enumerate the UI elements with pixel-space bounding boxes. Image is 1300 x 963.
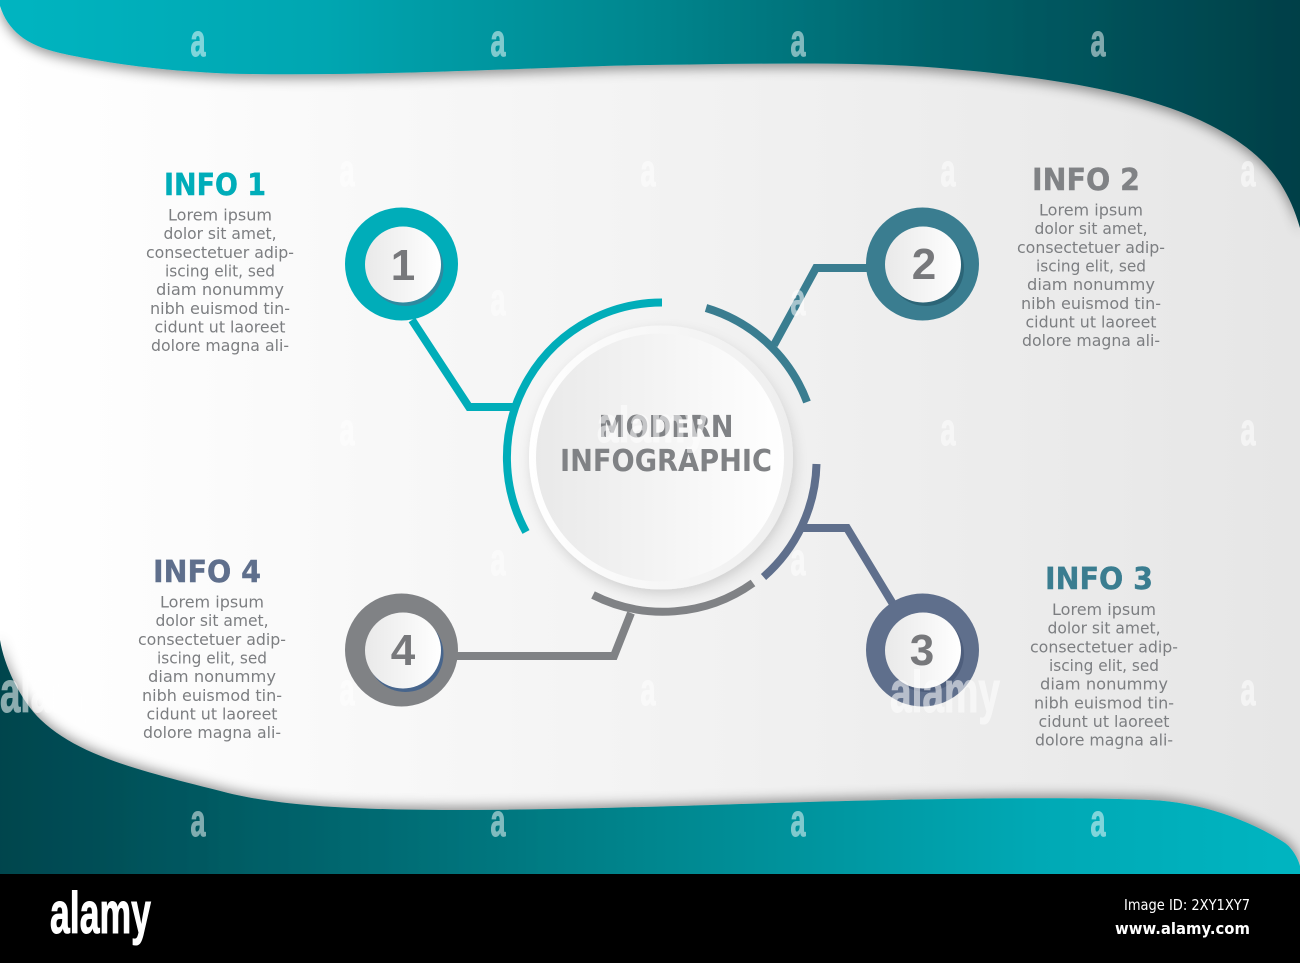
node 4: 4 bbox=[391, 626, 416, 675]
text: info 1 body: diam nonummy bbox=[156, 280, 284, 299]
node 2: 2 bbox=[912, 240, 936, 289]
text: info 1 body: consectetuer adip- bbox=[146, 243, 294, 262]
block: info 3 bbox=[1030, 562, 1178, 750]
text: info 4 body: cidunt ut laoreet bbox=[146, 704, 278, 724]
watermarks on bands: a bbox=[490, 15, 506, 66]
top wave band bbox=[0, 0, 1300, 228]
block: info 1 bbox=[146, 168, 294, 355]
watermarks on panel: a bbox=[790, 274, 806, 325]
central disc bbox=[529, 326, 793, 590]
text: info 2 body: dolore magna ali- bbox=[1022, 331, 1160, 350]
bottom wave band bbox=[0, 640, 1300, 874]
watermarks on panel: a bbox=[640, 145, 656, 196]
text: info 2 body bbox=[1017, 200, 1165, 350]
text: info 3 body: consectetuer adip- bbox=[1030, 637, 1178, 656]
text: info 2 body: diam nonummy bbox=[1027, 275, 1155, 294]
arc segment 4 bbox=[593, 583, 753, 612]
watermarks on panel: alamy bbox=[597, 397, 707, 453]
text: info 3 body: dolor sit amet, bbox=[1048, 619, 1160, 638]
connector 2 bbox=[774, 268, 869, 345]
watermarks on bands bbox=[190, 15, 1106, 846]
connector 1 bbox=[412, 320, 513, 407]
heading: info 1: INFO 1 bbox=[164, 168, 266, 203]
text: info 2 body: dolor sit amet, bbox=[1034, 219, 1148, 238]
watermarks on bands: a bbox=[190, 15, 206, 66]
watermarks on panel: a bbox=[940, 404, 956, 455]
node 1: 1 bbox=[391, 241, 415, 290]
watermarks on bands: a bbox=[1090, 795, 1106, 846]
watermarks on panel bbox=[0, 145, 1256, 725]
text: info 3 body: cidunt ut laoreet bbox=[1038, 712, 1170, 731]
heading: info 4: INFO 4 bbox=[153, 555, 261, 590]
heading: info 3: INFO 3 bbox=[1045, 562, 1153, 597]
block: info 4 bbox=[138, 555, 286, 742]
text: info 3 body: dolore magna ali- bbox=[1035, 731, 1173, 750]
arc segment 2 bbox=[706, 308, 807, 402]
heading: info 2: INFO 2 bbox=[1032, 163, 1140, 198]
arc segment 3 bbox=[764, 464, 816, 577]
arc segment 1 bbox=[507, 302, 662, 532]
text: info 1 body: iscing elit, sed bbox=[165, 262, 275, 280]
watermarks on panel: a bbox=[340, 145, 355, 196]
watermarks on panel: a bbox=[1240, 145, 1256, 196]
text: info 3 body: nibh euismod tin- bbox=[1034, 693, 1174, 712]
text: info 4 body: diam nonummy bbox=[148, 667, 276, 686]
text: info 2 body: consectetuer adip- bbox=[1017, 238, 1165, 257]
watermarks on bands: a bbox=[790, 15, 806, 66]
text: info 1 body: dolor sit amet, bbox=[164, 224, 276, 243]
text: info 2 body: Lorem ipsum bbox=[1039, 200, 1143, 220]
footer logo: alamy bbox=[50, 881, 151, 946]
node 3 bbox=[866, 594, 979, 706]
watermarks on panel: a bbox=[490, 534, 506, 585]
central ring segments bbox=[507, 302, 816, 612]
watermarks on panel: alamy bbox=[0, 660, 104, 725]
text: info 4 body: iscing elit, sed bbox=[157, 648, 267, 668]
text: info 4 body: Lorem ipsum bbox=[160, 592, 264, 612]
connector 4 bbox=[456, 613, 631, 656]
text: info 2 body: nibh euismod tin- bbox=[1021, 294, 1161, 313]
block: info 2 bbox=[1017, 163, 1165, 350]
central title: INFOGRAPHIC bbox=[560, 444, 772, 479]
watermarks on bands: a bbox=[1090, 15, 1106, 66]
node 4 bbox=[345, 594, 458, 706]
central title: MODERN bbox=[598, 410, 734, 445]
watermarks on bands: a bbox=[790, 795, 806, 846]
text: info 1 body: dolore magna ali- bbox=[151, 336, 289, 355]
connector 3 bbox=[803, 528, 893, 604]
node 1 bbox=[345, 208, 458, 320]
text: info 1 body: Lorem ipsum bbox=[168, 206, 272, 224]
text: info 3 body: iscing elit, sed bbox=[1049, 656, 1159, 675]
watermarks on panel: a bbox=[490, 274, 506, 325]
text: info 4 body: nibh euismod tin- bbox=[142, 686, 282, 705]
watermarks on panel: a bbox=[790, 534, 806, 585]
text: info 4 body: consectetuer adip- bbox=[138, 630, 286, 649]
watermarks on panel: a bbox=[940, 145, 956, 196]
watermarks on panel: alamy bbox=[890, 660, 1000, 725]
text: info 4 body: dolor sit amet, bbox=[156, 611, 268, 630]
text: info 3 body: diam nonummy bbox=[1040, 675, 1168, 694]
central title bbox=[560, 410, 772, 479]
footer url: www.alamy.com bbox=[1115, 919, 1250, 938]
text: info 2 body: cidunt ut laoreet bbox=[1026, 312, 1156, 332]
text: info 1 body: cidunt ut laoreet bbox=[154, 318, 286, 336]
watermarks on panel: a bbox=[1240, 404, 1256, 455]
text: info 3 body bbox=[1030, 600, 1178, 750]
text: info 1 body bbox=[146, 206, 294, 355]
text: info 4 body: dolore magna ali- bbox=[143, 723, 281, 742]
watermarks on panel: a bbox=[340, 664, 355, 715]
watermarks on panel: a bbox=[1240, 664, 1256, 715]
watermarks on panel: a bbox=[640, 664, 656, 715]
text: info 3 body: Lorem ipsum bbox=[1052, 600, 1156, 619]
text: info 4 body bbox=[138, 592, 286, 742]
text: info 1 body: nibh euismod tin- bbox=[150, 299, 290, 318]
watermarks on bands: a bbox=[490, 795, 506, 846]
node 3: 3 bbox=[910, 626, 934, 675]
text: info 2 body: iscing elit, sed bbox=[1036, 256, 1146, 276]
watermarks on bands: a bbox=[190, 795, 206, 846]
watermarks on panel: a bbox=[340, 404, 355, 455]
footer image id: Image ID: 2XY1XY7 bbox=[1124, 896, 1250, 914]
node 2 bbox=[866, 208, 979, 320]
footer bar bbox=[0, 874, 1300, 963]
